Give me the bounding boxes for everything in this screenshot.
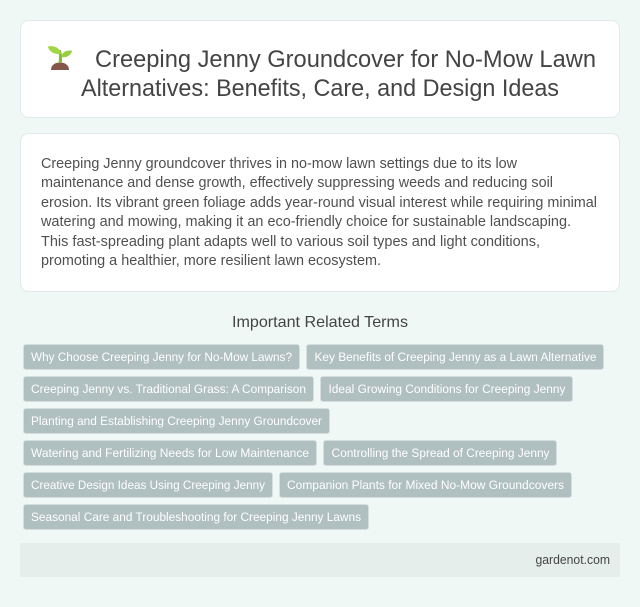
- tag: Ideal Growing Conditions for Creeping Jenny: [328, 382, 566, 396]
- tag: Controlling the Spread of Creeping Jenny: [332, 446, 550, 460]
- tag: [24, 376, 314, 402]
- tag: Watering and Fertilizing Needs for Low Maintenance: [31, 446, 309, 460]
- tag: Seasonal Care and Troubleshooting for Creeping Jenny Lawns: [31, 510, 361, 524]
- tag: [280, 472, 572, 498]
- heading: important related terms: Important Related Terms: [232, 314, 408, 331]
- tag: Why Choose Creeping Jenny for No-Mow Lawns?: [31, 350, 292, 364]
- footer bar: [20, 543, 620, 577]
- icon: seedling: [48, 46, 72, 70]
- tag: [320, 376, 572, 402]
- text block: description: [40, 156, 597, 269]
- text block: description: watering and mowing, making it an eco-friendly choice for sustainable landscaping.: [40, 214, 571, 230]
- tag: [24, 440, 316, 466]
- tag: [306, 344, 604, 370]
- tag: [24, 408, 330, 434]
- text block: description: promoting a healthier, more resilient lawn ecosystem.: [41, 253, 381, 269]
- panel: header card: [20, 20, 620, 118]
- tag: Creative Design Ideas Using Creeping Jenny: [31, 478, 266, 492]
- tag: [24, 504, 368, 530]
- panel: description card: [20, 134, 620, 292]
- text block: description: erosion. Its vibrant green foliage adds year-round visual interest while requiring minimal: [41, 195, 597, 211]
- tag: Companion Plants for Mixed No-Mow Groundcovers: [287, 478, 564, 492]
- tag: [24, 344, 300, 370]
- text block: description: maintenance and dense growth, effectively suppressing weeds and reducing soil: [41, 175, 553, 191]
- text block: description: This fast-spreading plant adapts well to various soil types and light conditions,: [41, 234, 540, 250]
- tag: Planting and Establishing Creeping Jenny Groundcover: [31, 414, 322, 428]
- tag: [24, 472, 272, 498]
- title: Alternatives: Benefits, Care, and Design Ideas: [81, 75, 559, 102]
- tag: Key Benefits of Creeping Jenny as a Lawn Alternative: [314, 350, 597, 364]
- title: Creeping Jenny Groundcover for No-Mow Lawn: [95, 46, 596, 73]
- tag: [324, 440, 556, 466]
- tag: Creeping Jenny vs. Traditional Grass: A Comparison: [31, 382, 306, 396]
- text block: description: Creeping Jenny groundcover thrives in no-mow lawn settings due to its low: [41, 156, 518, 172]
- title: [81, 46, 596, 102]
- tag list: [24, 344, 604, 530]
- footer text: gardenot.com: [536, 553, 610, 567]
